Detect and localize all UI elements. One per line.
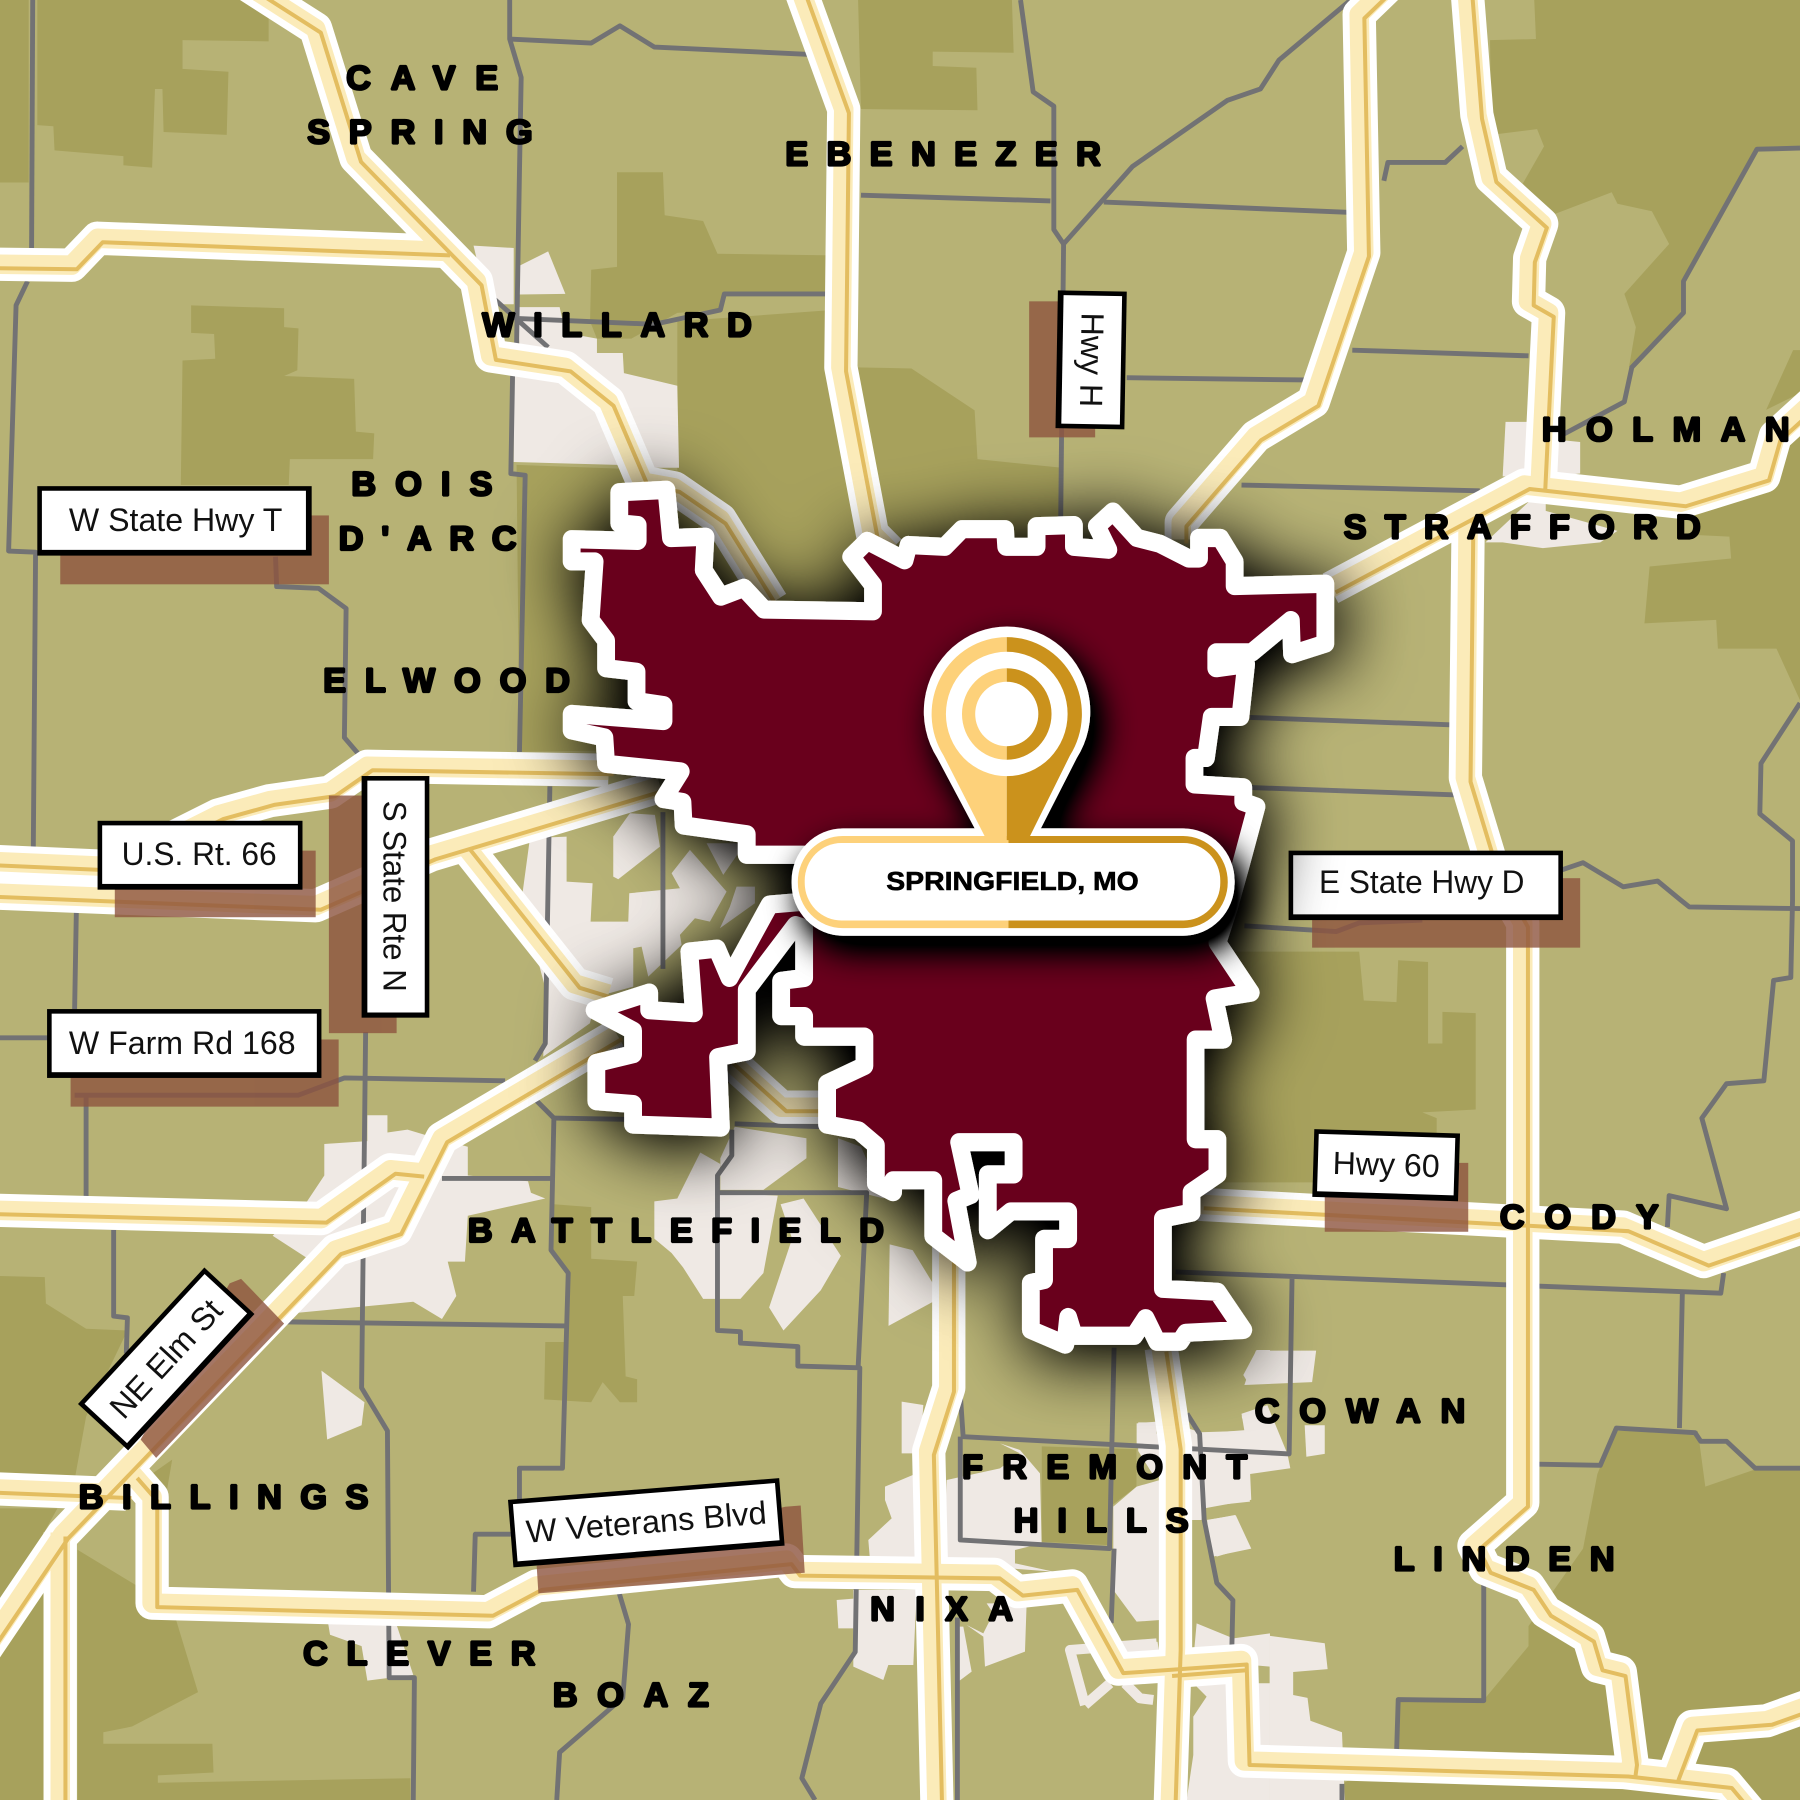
place names: D'ARC bbox=[339, 520, 517, 558]
road label: Hwy 60: Hwy 60 bbox=[1332, 1145, 1440, 1184]
place names: HOLMAN bbox=[1542, 411, 1790, 449]
road label: U.S. Rt. 66 bbox=[98, 821, 302, 890]
place names: LINDEN bbox=[1394, 1540, 1615, 1578]
road label: E State Hwy D: E State Hwy D bbox=[1319, 864, 1524, 900]
road label: Hwy H bbox=[1055, 290, 1127, 429]
city boundary: Springfield bbox=[572, 490, 1325, 1345]
road label: NE Elm St: NE Elm St bbox=[102, 1292, 230, 1425]
place names: SPRING bbox=[307, 113, 533, 151]
place names: COWAN bbox=[1255, 1392, 1465, 1430]
place names: BOIS bbox=[351, 465, 492, 503]
road label: W State Hwy T bbox=[37, 486, 312, 556]
place names: WILLARD bbox=[482, 306, 752, 344]
place names: ELWOOD bbox=[323, 662, 570, 700]
road label: NE Elm St bbox=[78, 1268, 254, 1450]
road label: W Farm Rd 168: W Farm Rd 168 bbox=[69, 1025, 296, 1061]
place names: CODY bbox=[1500, 1198, 1659, 1236]
place names: BATTLEFIELD bbox=[468, 1212, 884, 1250]
map pin and city name pill: SPRINGFIELD, MO bbox=[886, 868, 1139, 896]
place names: BOAZ bbox=[553, 1676, 709, 1714]
place names: CAVE bbox=[346, 60, 498, 98]
road label: U.S. Rt. 66: U.S. Rt. 66 bbox=[122, 836, 277, 872]
road label: W State Hwy T: W State Hwy T bbox=[69, 502, 282, 538]
road label: E State Hwy D bbox=[1289, 851, 1563, 920]
road label: Hwy 60 bbox=[1312, 1129, 1460, 1201]
road label: W Farm Rd 168 bbox=[47, 1009, 321, 1078]
place names: NIXA bbox=[870, 1590, 1013, 1628]
place names: FREMONT bbox=[962, 1449, 1247, 1487]
road label: S State Rte N bbox=[362, 776, 429, 1018]
place names: HILLS bbox=[1014, 1502, 1189, 1540]
road label: S State Rte N: S State Rte N bbox=[376, 801, 412, 992]
place names: EBENEZER bbox=[785, 135, 1101, 173]
place names: CLEVER bbox=[303, 1635, 536, 1673]
place names: BILLINGS bbox=[79, 1478, 368, 1516]
road label: W Veterans Blvd bbox=[508, 1478, 785, 1567]
town areas bbox=[273, 246, 1617, 1800]
place names: STRAFFORD bbox=[1344, 508, 1701, 546]
road highlight bars bbox=[60, 301, 1580, 1593]
road label: Hwy H: Hwy H bbox=[1073, 312, 1111, 408]
road label: W Veterans Blvd: W Veterans Blvd bbox=[525, 1494, 768, 1550]
map pin and city name pill bbox=[792, 626, 1235, 936]
